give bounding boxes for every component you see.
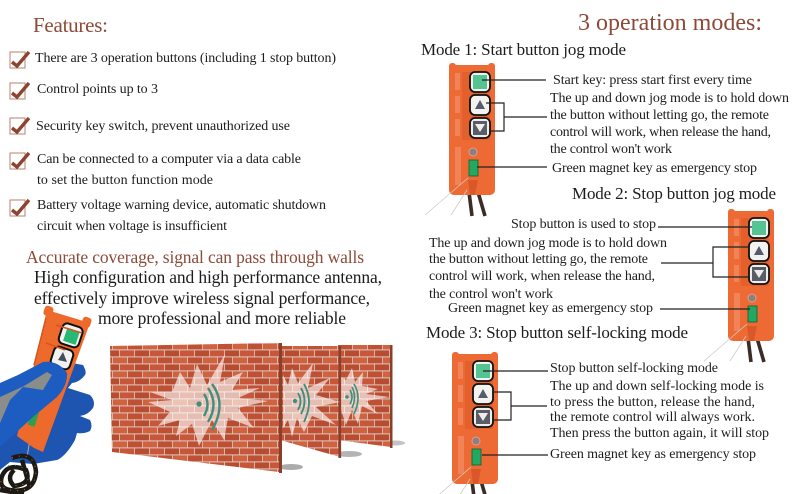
illustration: gloved hand holding remote <box>0 305 94 494</box>
feature 5 text <box>37 198 326 234</box>
remote body <box>17 305 92 452</box>
mode 2 heading: Mode 2: Stop button jog mode <box>572 184 776 203</box>
feature 4 text <box>37 152 301 188</box>
mode 1 heading: Mode 1: Start button jog mode <box>421 40 626 59</box>
mode 3 callout lines <box>482 371 548 455</box>
antenna description: effectively improve wireless signal performance, <box>34 288 370 308</box>
wall 2 <box>280 346 362 458</box>
self-locking description: Then press the button again, it will stop <box>550 426 769 441</box>
feature 3 text: Security key switch, prevent unauthorized use <box>36 119 290 134</box>
icon: checkmark 1 <box>10 52 29 68</box>
thumb and cuff <box>0 362 67 447</box>
jog description: control will work, when release the hand, <box>429 269 655 284</box>
panel: mode 1 <box>421 40 789 216</box>
icon: checkmark 3 <box>10 118 29 134</box>
wall 1 <box>110 343 303 473</box>
start key label: Start key: press start first every time <box>553 73 752 88</box>
jog description: the button without letting go, the remote <box>429 252 648 267</box>
title: 3 operation modes: 3 operation modes: <box>578 10 762 36</box>
self-locking description: The up and down self-locking mode is <box>550 379 764 394</box>
panel: mode 3 <box>426 323 769 494</box>
jog description <box>429 236 667 302</box>
feature 1 text: There are 3 operation buttons (including 1 stop button) <box>35 51 336 66</box>
emergency stop label: Green magnet key as emergency stop <box>448 301 653 316</box>
self-locking description <box>550 379 769 441</box>
feature 5 text: circuit when voltage is insufficient <box>37 219 227 234</box>
feature 4 text: Can be connected to a computer via a data cable <box>37 152 301 167</box>
antenna description <box>34 267 382 328</box>
illustration: brick walls with signal <box>110 343 405 473</box>
remote 3 <box>428 352 498 494</box>
panel: mode 2 <box>429 184 776 362</box>
icon: checkmark 4 <box>10 153 29 169</box>
icon: checkmark 2 <box>10 83 29 99</box>
self-locking description: to press the button, release the hand, <box>550 395 755 410</box>
antenna description: more professional and more reliable <box>98 308 346 328</box>
wall 3 <box>338 345 405 448</box>
jog description <box>550 91 789 157</box>
stop button label: Stop button is used to stop <box>511 217 656 232</box>
remote 1 <box>425 63 495 216</box>
heading: signal coverage: Accurate coverage, signal can pass through walls <box>26 247 364 267</box>
jog description: the button without letting go, the remote <box>550 108 769 123</box>
mode 2 callout lines <box>658 227 752 309</box>
glove back fingers <box>0 363 94 470</box>
antenna description: High configuration and high performance antenna, <box>34 267 382 287</box>
mode 3 heading: Mode 3: Stop button self-locking mode <box>426 323 688 342</box>
feature 5 text: Battery voltage warning device, automatic shutdown <box>37 198 326 213</box>
green magnet key <box>28 410 39 427</box>
emergency stop label: Green magnet key as emergency stop <box>552 161 757 176</box>
remote 2 <box>704 209 774 362</box>
mode 1 callout lines <box>477 80 547 167</box>
emergency stop label: Green magnet key as emergency stop <box>550 447 756 462</box>
jog description: the control won't work <box>429 287 553 302</box>
cord bundle <box>0 425 36 494</box>
jog description: The up and down jog mode is to hold down <box>429 236 667 251</box>
jog description: control will work, when release the hand, <box>550 125 771 140</box>
icon: checkmark 5 <box>10 200 29 216</box>
feature list <box>10 51 336 234</box>
feature 4 text: to set the button function mode <box>37 173 213 188</box>
self-locking description: the remote control will always work. <box>550 410 755 425</box>
self-locking label: Stop button self-locking mode <box>550 361 718 376</box>
jog description: The up and down jog mode is to hold down <box>550 91 789 106</box>
grey glove palm <box>0 372 52 423</box>
feature 2 text: Control points up to 3 <box>37 82 158 97</box>
title: Features: Features: <box>33 13 108 37</box>
jog description: the control won't work <box>550 142 672 157</box>
